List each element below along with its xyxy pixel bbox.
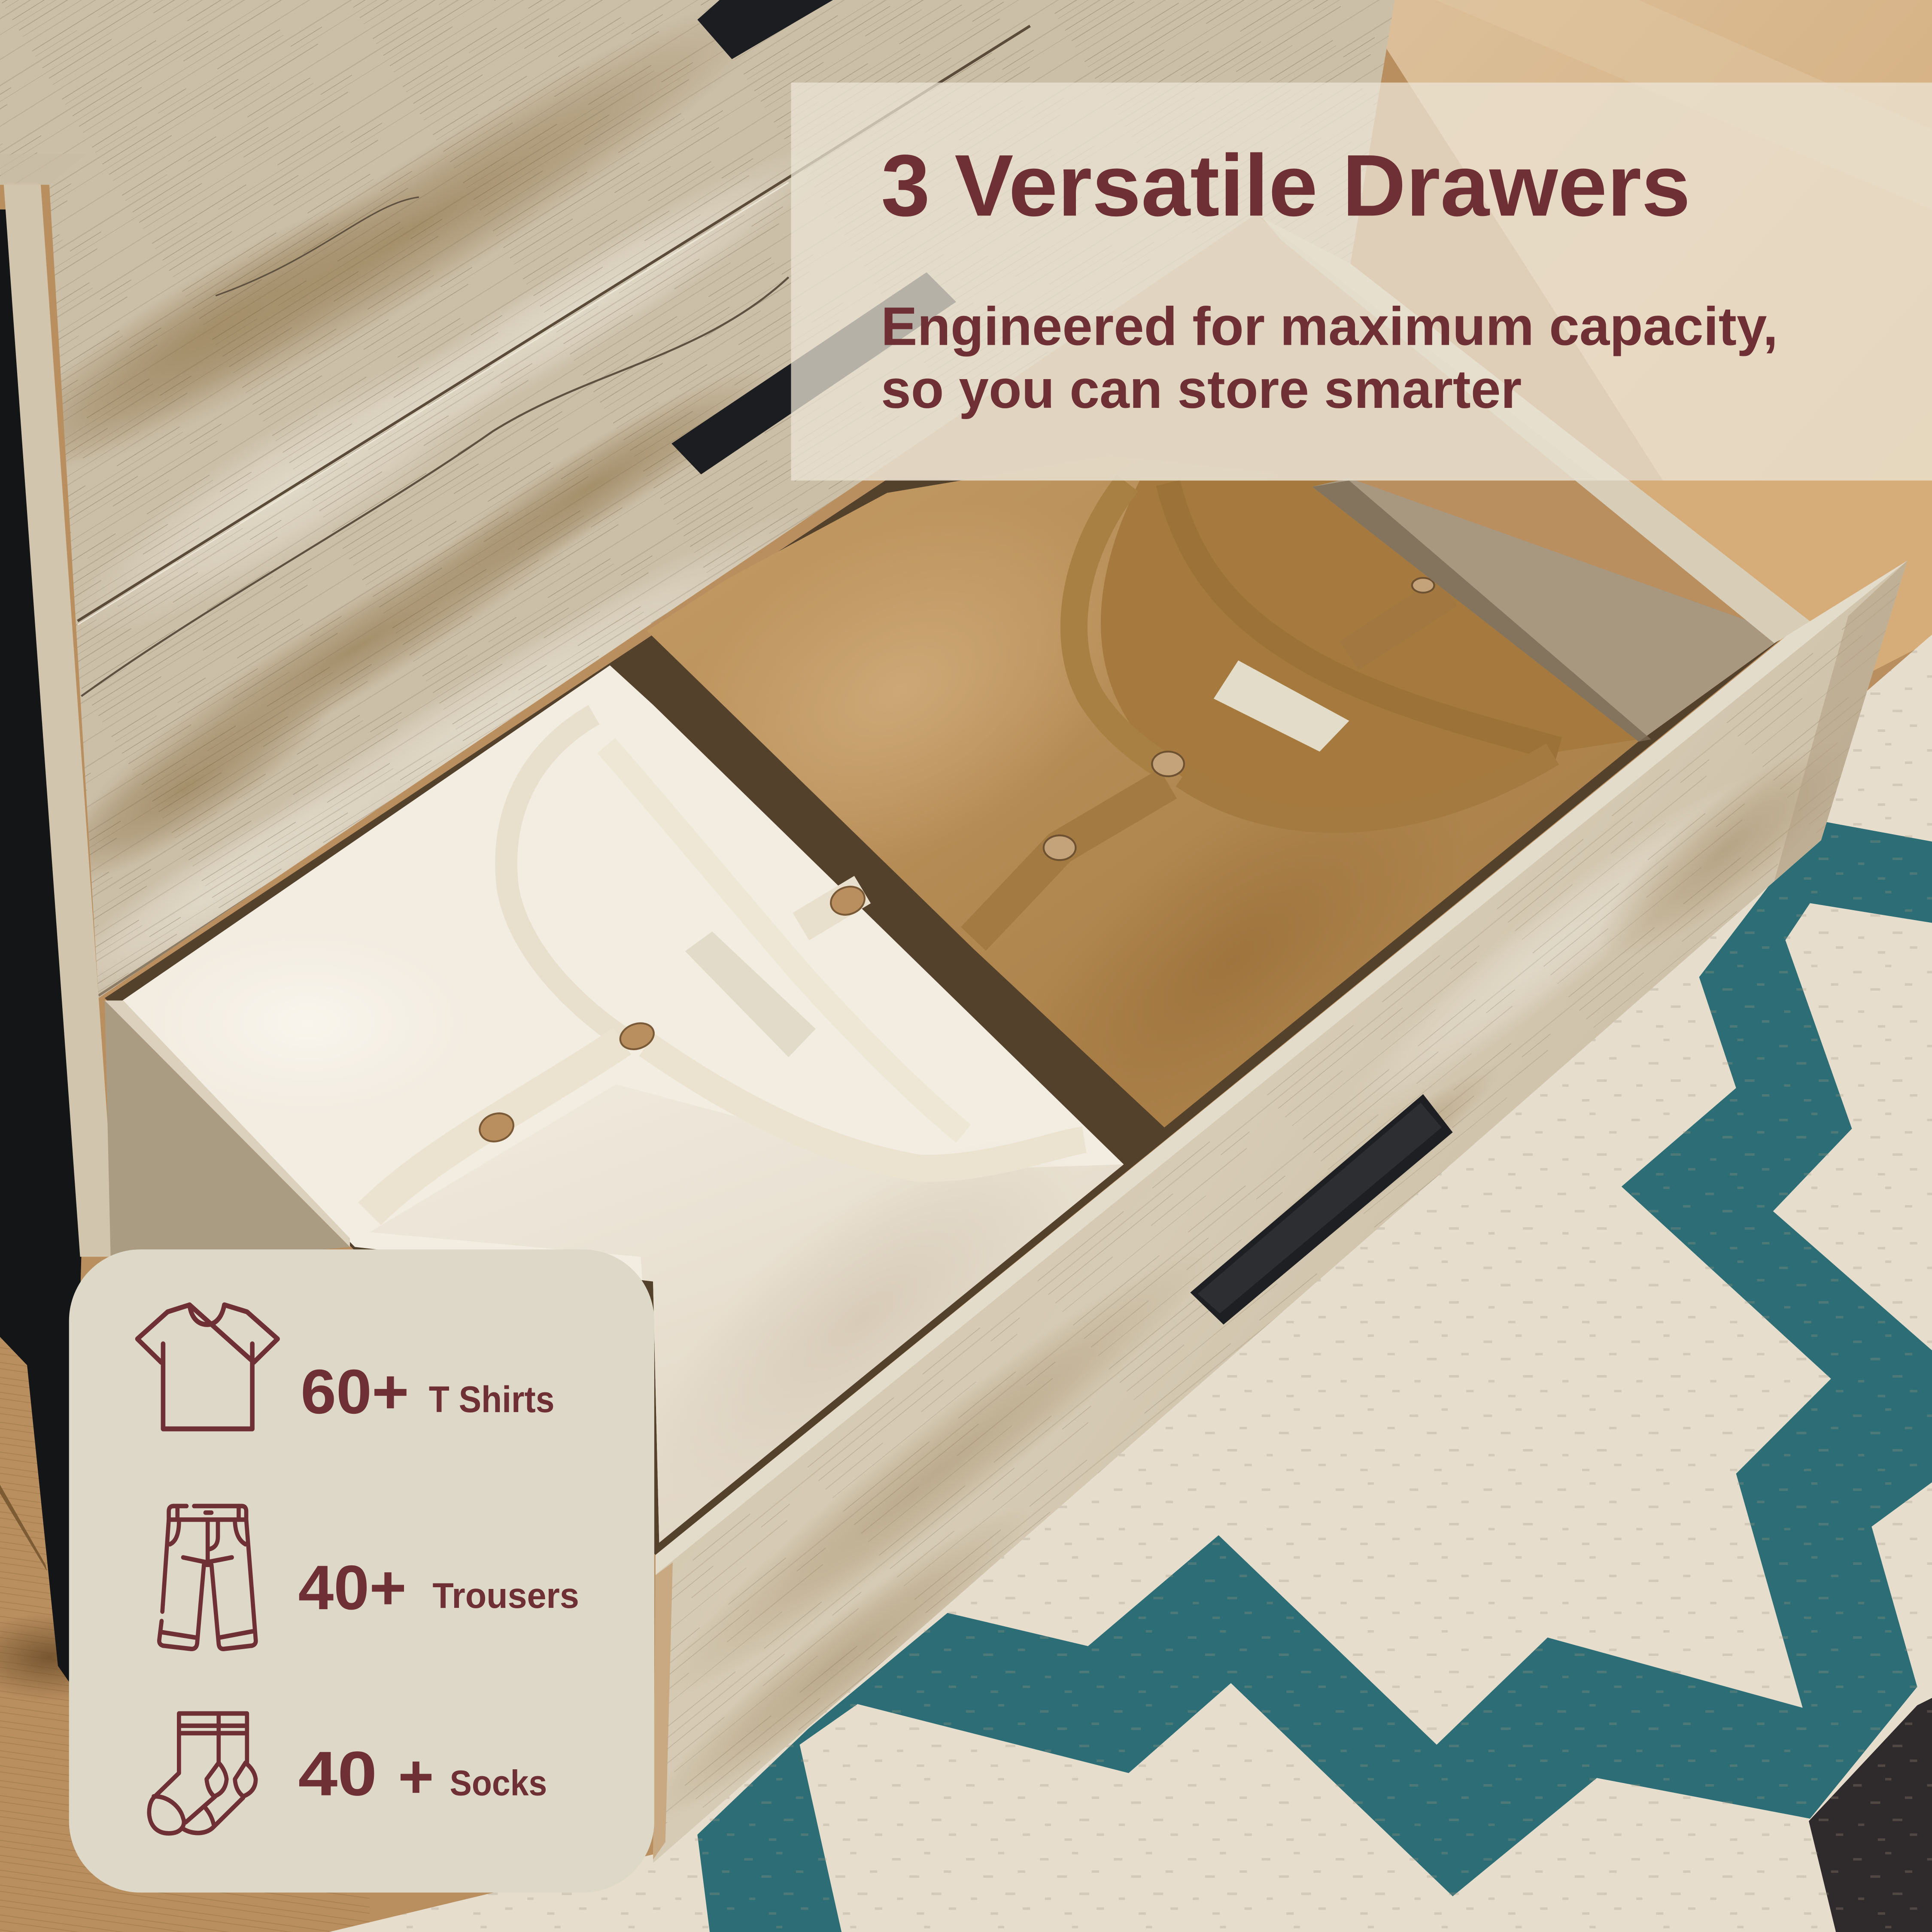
wood tone streaks xyxy=(0,0,854,1027)
heading panel xyxy=(791,82,1932,480)
stat: trousers: 40+ xyxy=(298,1553,407,1623)
icon: t-shirt xyxy=(137,1305,278,1429)
stat: trousers xyxy=(298,1553,579,1623)
drawer handle: front xyxy=(1190,1094,1453,1324)
patterned rug xyxy=(329,635,1932,1932)
drawer gaps xyxy=(78,26,1030,621)
dresser upper drawers xyxy=(0,0,1405,1027)
black leg xyxy=(0,210,81,1682)
heading: 3 Versatile Drawers xyxy=(881,137,1691,234)
stat: socks xyxy=(298,1739,547,1811)
tan folded shirt xyxy=(647,480,1638,1127)
subheading: Engineered for maximum capacity, xyxy=(881,296,1778,357)
tan buttons xyxy=(1044,578,1434,860)
icon: trousers xyxy=(159,1506,256,1649)
shirt collar xyxy=(506,715,622,1037)
teal zigzag xyxy=(697,820,1932,1932)
shirt buttons xyxy=(476,882,869,1146)
stat: t-shirts xyxy=(301,1357,554,1427)
subheading: so you can store smarter xyxy=(881,359,1522,419)
drawer front panel xyxy=(622,554,1922,1873)
dark rug motif xyxy=(1809,1698,1932,1932)
stat: trousers: Trousers xyxy=(432,1576,579,1616)
tan collar xyxy=(1074,483,1164,766)
stat: t-shirts: 60+ xyxy=(301,1357,409,1427)
drawer handle: middle xyxy=(671,272,956,474)
drawer interior shadow xyxy=(105,479,1786,1555)
stat: socks: Socks xyxy=(450,1763,547,1803)
drawer handle: top xyxy=(697,0,833,59)
capacity panel xyxy=(69,1249,654,1893)
shirt label xyxy=(685,932,816,1057)
stat: socks: + xyxy=(398,1742,434,1811)
drawer inner right wall xyxy=(863,210,1811,742)
stat: t-shirts: T Shirts xyxy=(429,1379,554,1420)
icon: socks xyxy=(149,1713,256,1833)
white folded shirt xyxy=(117,665,1131,1560)
subheading xyxy=(881,296,1778,419)
dresser frame post xyxy=(0,154,350,1682)
inner neck xyxy=(1101,480,1639,818)
stat: socks: 40 xyxy=(298,1739,377,1809)
tan label xyxy=(1214,660,1349,752)
